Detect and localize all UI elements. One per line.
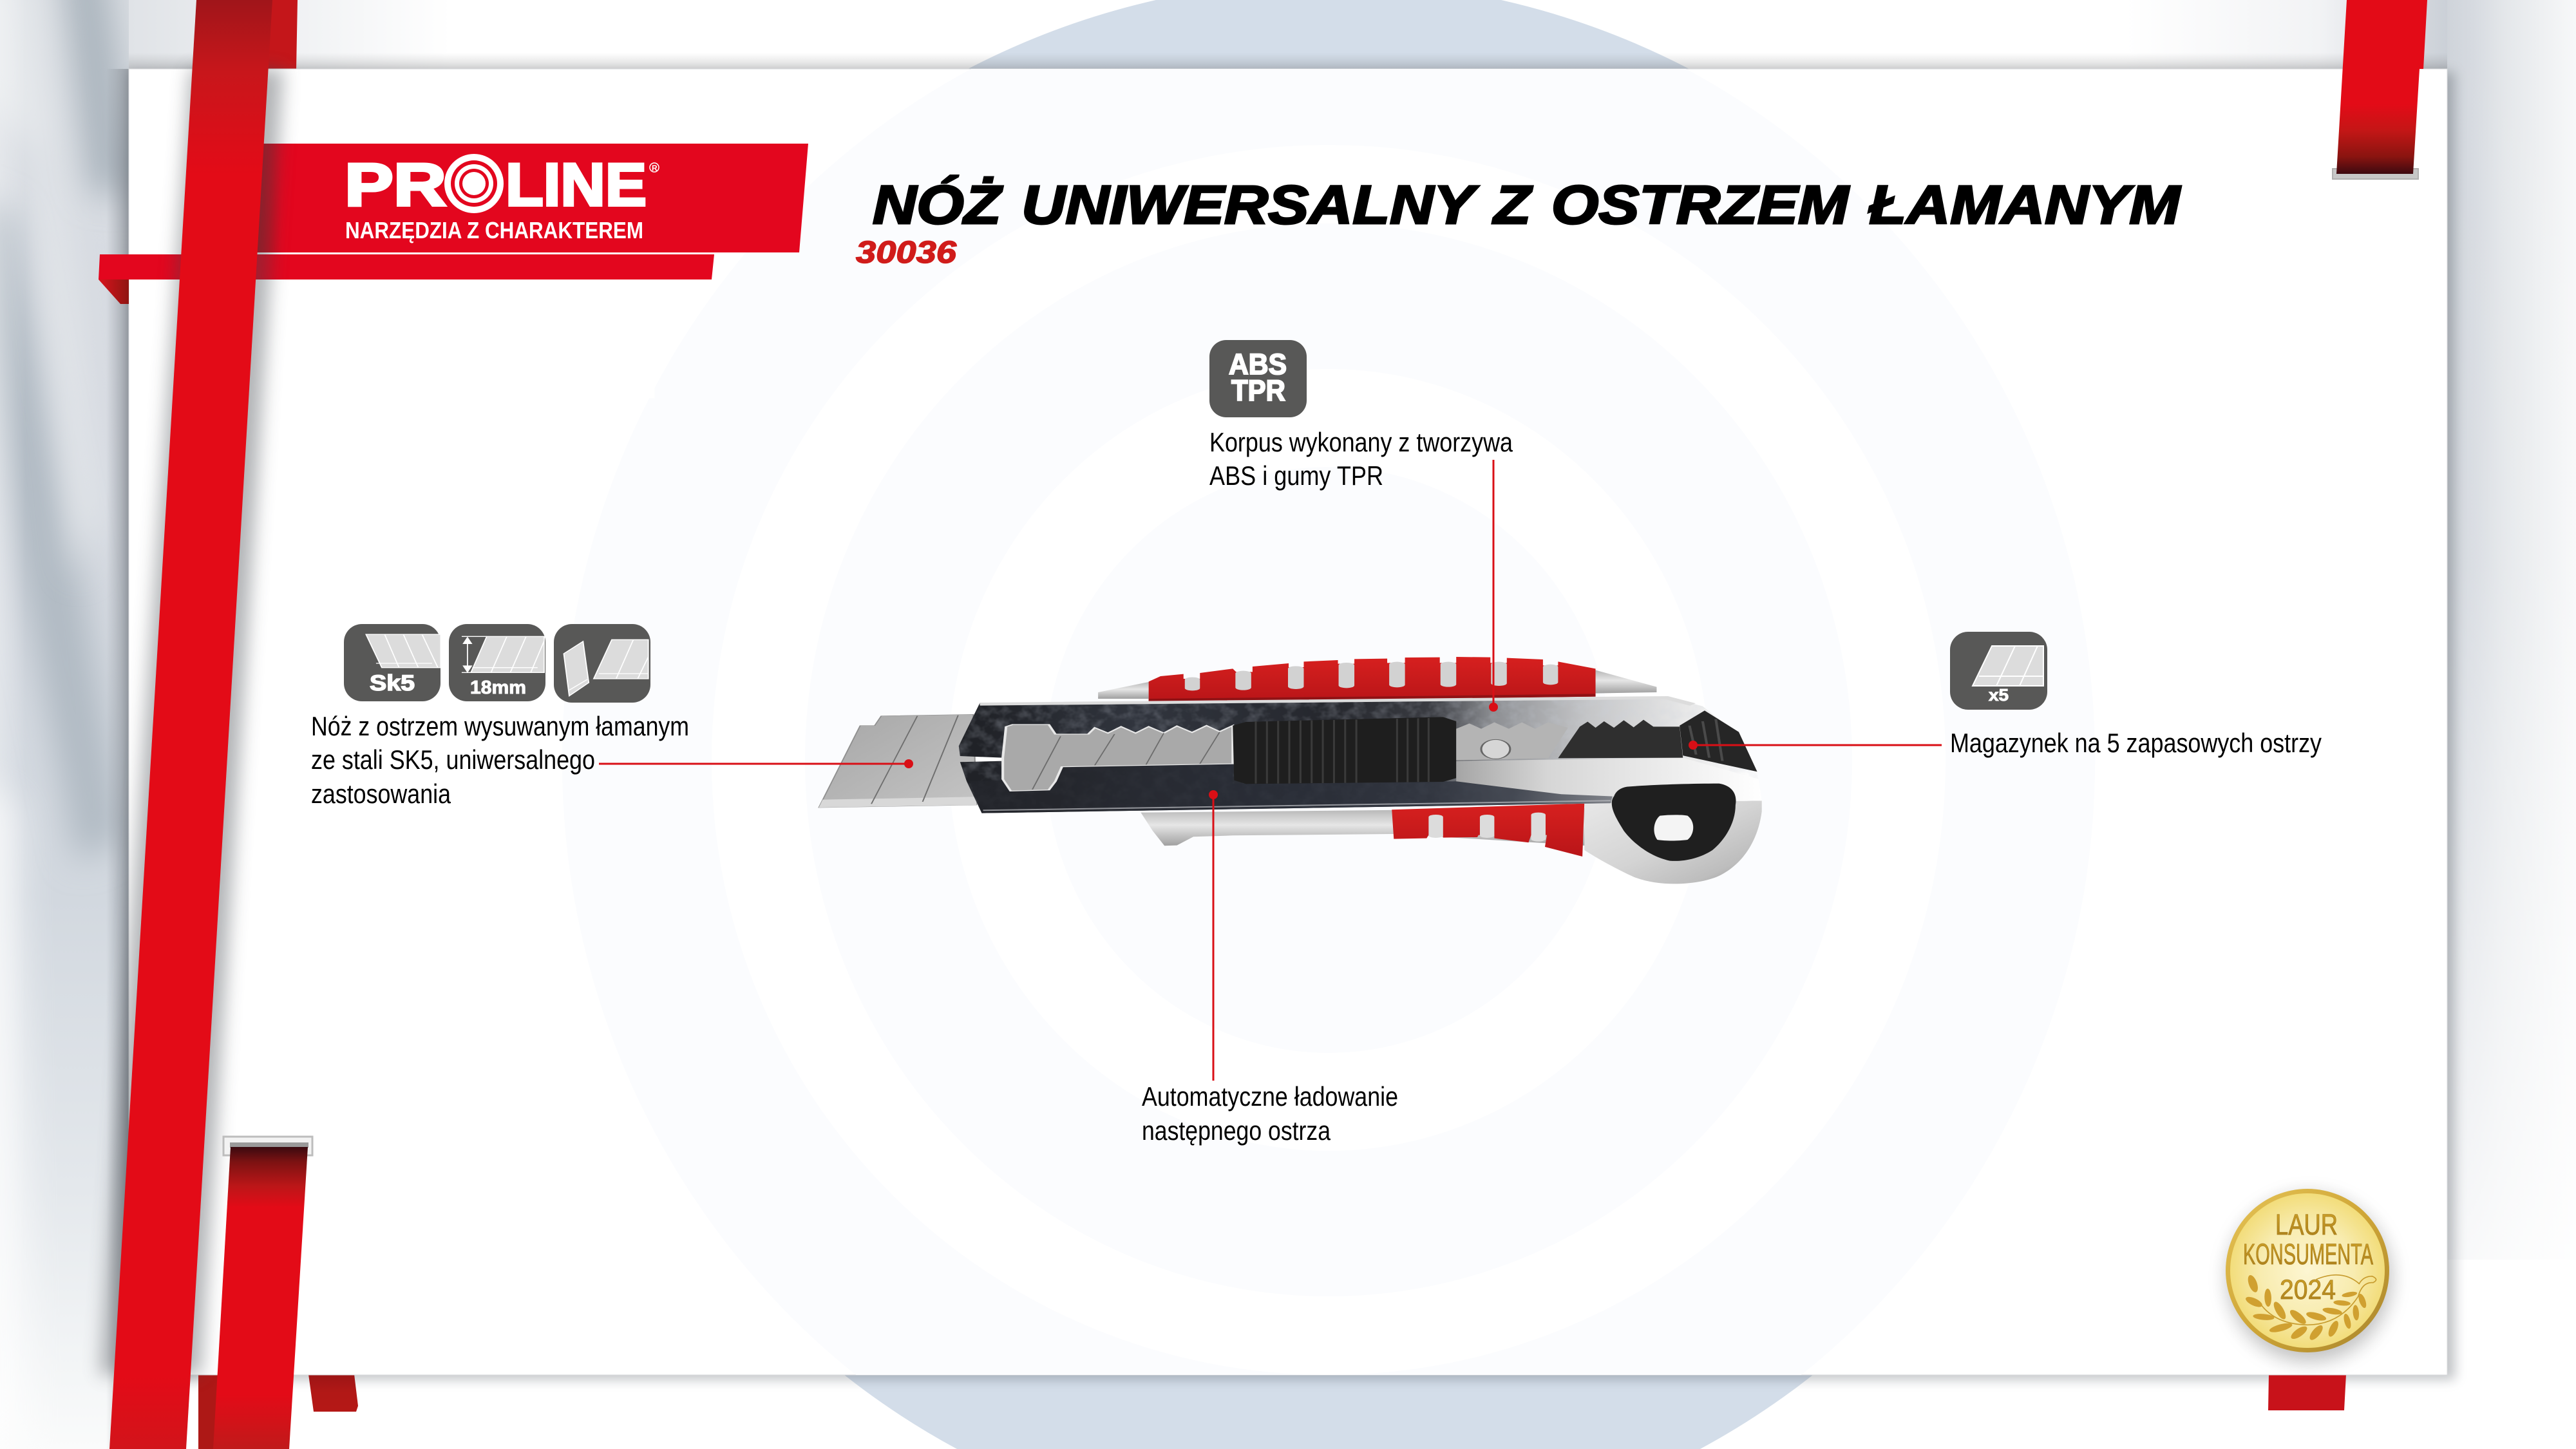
knife: blade	[819, 714, 976, 808]
logo: PROLINE: R	[652, 164, 658, 173]
text: blade feature: ze stali SK5, uniwersalnego	[311, 744, 595, 775]
background: left curtain	[0, 0, 135, 1449]
text: automatic loading: Automatyczne ładowanie	[1142, 1081, 1398, 1112]
text: body material: ABS i gumy TPR	[1209, 460, 1383, 491]
slot bottom left ribbon	[223, 1137, 312, 1155]
second ribbon	[213, 1147, 308, 1449]
knife: black handle with hole	[1612, 784, 1736, 861]
medal: Laur Konsumenta 2024: KONSUMENTA	[2243, 1238, 2373, 1271]
icon: ABS TPR	[1209, 340, 1307, 417]
logo: PROLINE: PR	[345, 151, 446, 218]
knife: black slider	[1233, 717, 1456, 784]
medal: Laur Konsumenta 2024	[2226, 1189, 2392, 1362]
callout line: body	[1489, 460, 1498, 712]
icon: x5 spare blades: x5	[1989, 685, 2009, 705]
knife: dark rear piece	[1558, 720, 1683, 758]
background: blue disc top part	[968, 0, 1689, 69]
ribbon stub bottom centre	[308, 1374, 358, 1412]
product code: 30036	[856, 236, 956, 270]
logo tagline: NARZĘDZIA Z CHARAKTEREM	[345, 217, 643, 243]
ribbon stub bottom right	[2268, 1374, 2346, 1410]
knife: upper red grip	[1149, 657, 1596, 701]
banner shadow beside ribbon	[252, 144, 281, 252]
knife: lower red grip	[1392, 804, 1584, 857]
knife: black end cap	[1680, 710, 1757, 772]
top right ribbon	[2336, 0, 2427, 174]
icon: 18mm width: 18mm	[470, 677, 526, 698]
background: top right strip	[2125, 0, 2447, 69]
medal: Laur Konsumenta 2024: 2024	[2280, 1274, 2336, 1305]
icon: x5 spare blades	[1950, 632, 2047, 710]
knife: chrome body	[959, 697, 1762, 813]
main ribbon shadow	[100, 69, 283, 1375]
icon: Sk5 blade: Sk5	[370, 671, 415, 696]
background: top left strip	[129, 0, 451, 69]
icon: 18mm width	[449, 624, 545, 701]
text: body material: Korpus wykonany z tworzywa	[1209, 427, 1513, 457]
banner main	[246, 144, 808, 252]
slot top right ribbon	[2333, 169, 2418, 179]
background: right curtain	[2447, 0, 2576, 1260]
medal: Laur Konsumenta 2024: LAUR	[2275, 1208, 2338, 1241]
knife: handle silver	[1584, 800, 1762, 884]
shadow above panel	[129, 53, 2447, 69]
icon: ABS TPR: TPR	[1231, 374, 1285, 407]
text: automatic loading: następnego ostrza	[1142, 1115, 1331, 1146]
knife: lower bright strip	[1456, 758, 1762, 800]
icon: snap-off blade	[554, 624, 650, 703]
knife: right window with bolt	[1456, 723, 1568, 761]
callout line: blade	[599, 759, 913, 768]
title: NÓŻ UNIWERSALNY Z OSTRZEM ŁAMANYM	[873, 175, 2181, 235]
icon: Sk5 blade	[344, 624, 440, 701]
logo: PROLINE: LINE	[506, 151, 647, 218]
ribbon stub bottom left	[198, 1374, 222, 1449]
text: blade feature: zastosowania	[311, 779, 451, 809]
ribbon behind panel top left	[258, 0, 298, 69]
callout line: loading	[1209, 790, 1218, 1081]
knife: top silver caps	[1098, 670, 1656, 699]
text: blade feature: Nóż z ostrzem wysuwanym łamanym	[311, 711, 689, 741]
knife: lower slider	[1141, 808, 1587, 846]
callout line: magazine	[1689, 741, 1942, 750]
knife illustration	[819, 657, 1762, 884]
background: blue disc bottom part	[844, 1375, 1813, 1449]
main left ribbon	[109, 0, 272, 1449]
text: magazine: Magazynek na 5 zapasowych ostrzy	[1950, 728, 2322, 758]
concentric pale rings	[562, 69, 2095, 1375]
banner flap	[99, 279, 129, 304]
knife: blade window	[1003, 724, 1233, 791]
banner lower band	[99, 254, 714, 279]
logo: PROLINE	[345, 151, 659, 218]
icon: ABS TPR: ABS	[1229, 348, 1287, 381]
